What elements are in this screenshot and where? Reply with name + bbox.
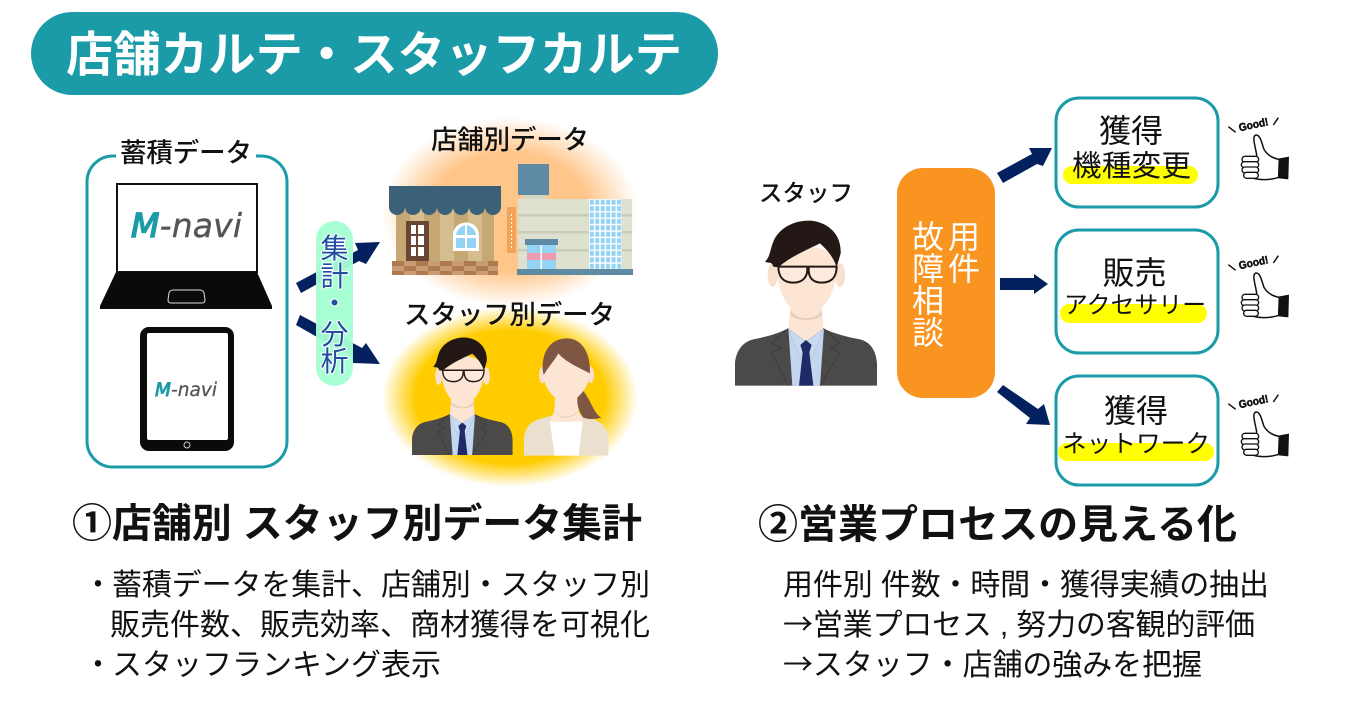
card heading: 獲得 — [1099, 113, 1163, 149]
text block: section 2 details: 用件別 件数・時間・獲得実績の抽出 — [783, 569, 1269, 602]
pill: aggregate and analyze: 計 — [320, 261, 349, 292]
icon: laptop — [100, 184, 272, 309]
text block: section 2 details: →スタッフ・店舗の強みを把握 — [783, 640, 1202, 684]
label: staff data: スタッフ別データ — [404, 300, 615, 330]
panel: store data — [382, 117, 638, 307]
text block: section 2 details: →営業プロセス , 努力の客観的評価 — [783, 600, 1255, 644]
card sub label: アクセサリー — [1064, 292, 1206, 319]
title banner — [31, 12, 718, 95]
card heading: 販売 — [1102, 255, 1167, 291]
icon: thumbs up — [1228, 393, 1289, 457]
text block: section 1 details: ・ — [83, 649, 113, 682]
card sub label: 機種変更 — [1072, 150, 1191, 183]
pill: aggregate and analyze: 析 — [320, 346, 349, 377]
panel: accumulated data devices — [87, 138, 287, 467]
pill: aggregate and analyze — [316, 221, 353, 386]
icon: thumbs up — [1228, 116, 1289, 180]
card heading: 獲得 — [1104, 393, 1168, 429]
icon: tablet — [140, 327, 234, 451]
label: store data: 店舗別データ — [431, 125, 589, 155]
icon: tablet: M-navi — [155, 380, 218, 401]
text block: section 1 details: 蓄積データを集計、店舗別・スタッフ別 — [112, 569, 650, 602]
heading: section 2: ②営業プロセスの見える化 — [758, 503, 1237, 547]
card: acquisition network — [1056, 376, 1218, 485]
text block: section 2 details — [783, 569, 1269, 684]
icon: laptop: M-navi — [131, 206, 242, 245]
icon: staff portrait — [735, 221, 877, 386]
icon: female staff — [524, 338, 608, 456]
arrow: to store data — [296, 242, 380, 293]
icon: thumbs up — [1228, 254, 1289, 318]
box: inquiry type: 障 — [912, 251, 944, 287]
box: inquiry type: 用 — [948, 219, 980, 255]
text block: section 1 details — [83, 569, 650, 682]
icon: shop — [389, 186, 501, 275]
pill: aggregate and analyze: 分 — [320, 319, 349, 350]
box: inquiry type: 故 — [912, 219, 944, 255]
pill: aggregate and analyze: 集 — [320, 233, 349, 264]
box: inquiry type: 件 — [948, 251, 980, 287]
text block: section 1 details: スタッフランキング表示 — [112, 649, 441, 682]
arrow: to acquisition card 2 — [997, 385, 1050, 425]
box: inquiry type: 相 — [912, 283, 944, 319]
arrow: to staff data — [296, 315, 380, 364]
card: acquisition device change — [1056, 98, 1218, 207]
label: accumulated data: 蓄積データ — [120, 138, 252, 168]
arrow: to sales card — [1000, 274, 1048, 294]
pill: aggregate and analyze: ・ — [320, 288, 349, 319]
heading: section 1: ①店舗別 スタッフ別データ集計 — [72, 501, 642, 546]
box: inquiry type: 談 — [912, 315, 944, 351]
icon: male staff — [412, 337, 513, 455]
title text: 店舗カルテ・スタッフカルテ — [66, 29, 682, 82]
card: sales accessories — [1056, 230, 1218, 353]
text block: section 1 details: 販売件数、販売効率、商材獲得を可視化 — [110, 609, 650, 642]
arrow: to acquisition card 1 — [997, 148, 1052, 183]
card sub label: ネットワーク — [1062, 431, 1210, 458]
panel: staff data — [382, 300, 638, 487]
label: staff: スタッフ — [759, 180, 853, 206]
text block: section 1 details: ・ — [83, 569, 113, 602]
box: inquiry type — [897, 168, 995, 398]
icon: department building — [507, 164, 633, 275]
